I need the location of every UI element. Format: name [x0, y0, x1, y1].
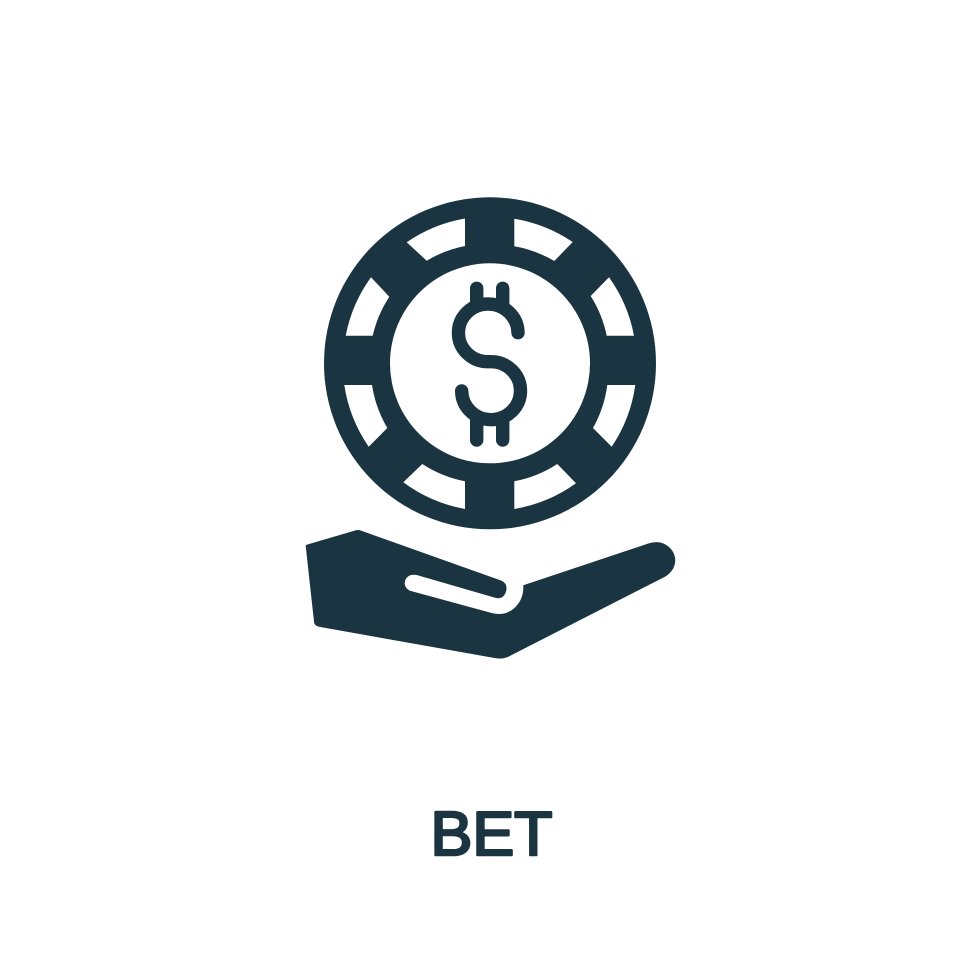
- dollar sign: [458, 288, 520, 440]
- icon: open hand: [306, 530, 675, 659]
- chip body: [324, 197, 656, 529]
- chip centre: [390, 263, 590, 463]
- chip edge slots: [344, 218, 635, 509]
- title: BET: BET: [430, 800, 552, 869]
- icon: casino chip with dollar sign: [324, 197, 656, 529]
